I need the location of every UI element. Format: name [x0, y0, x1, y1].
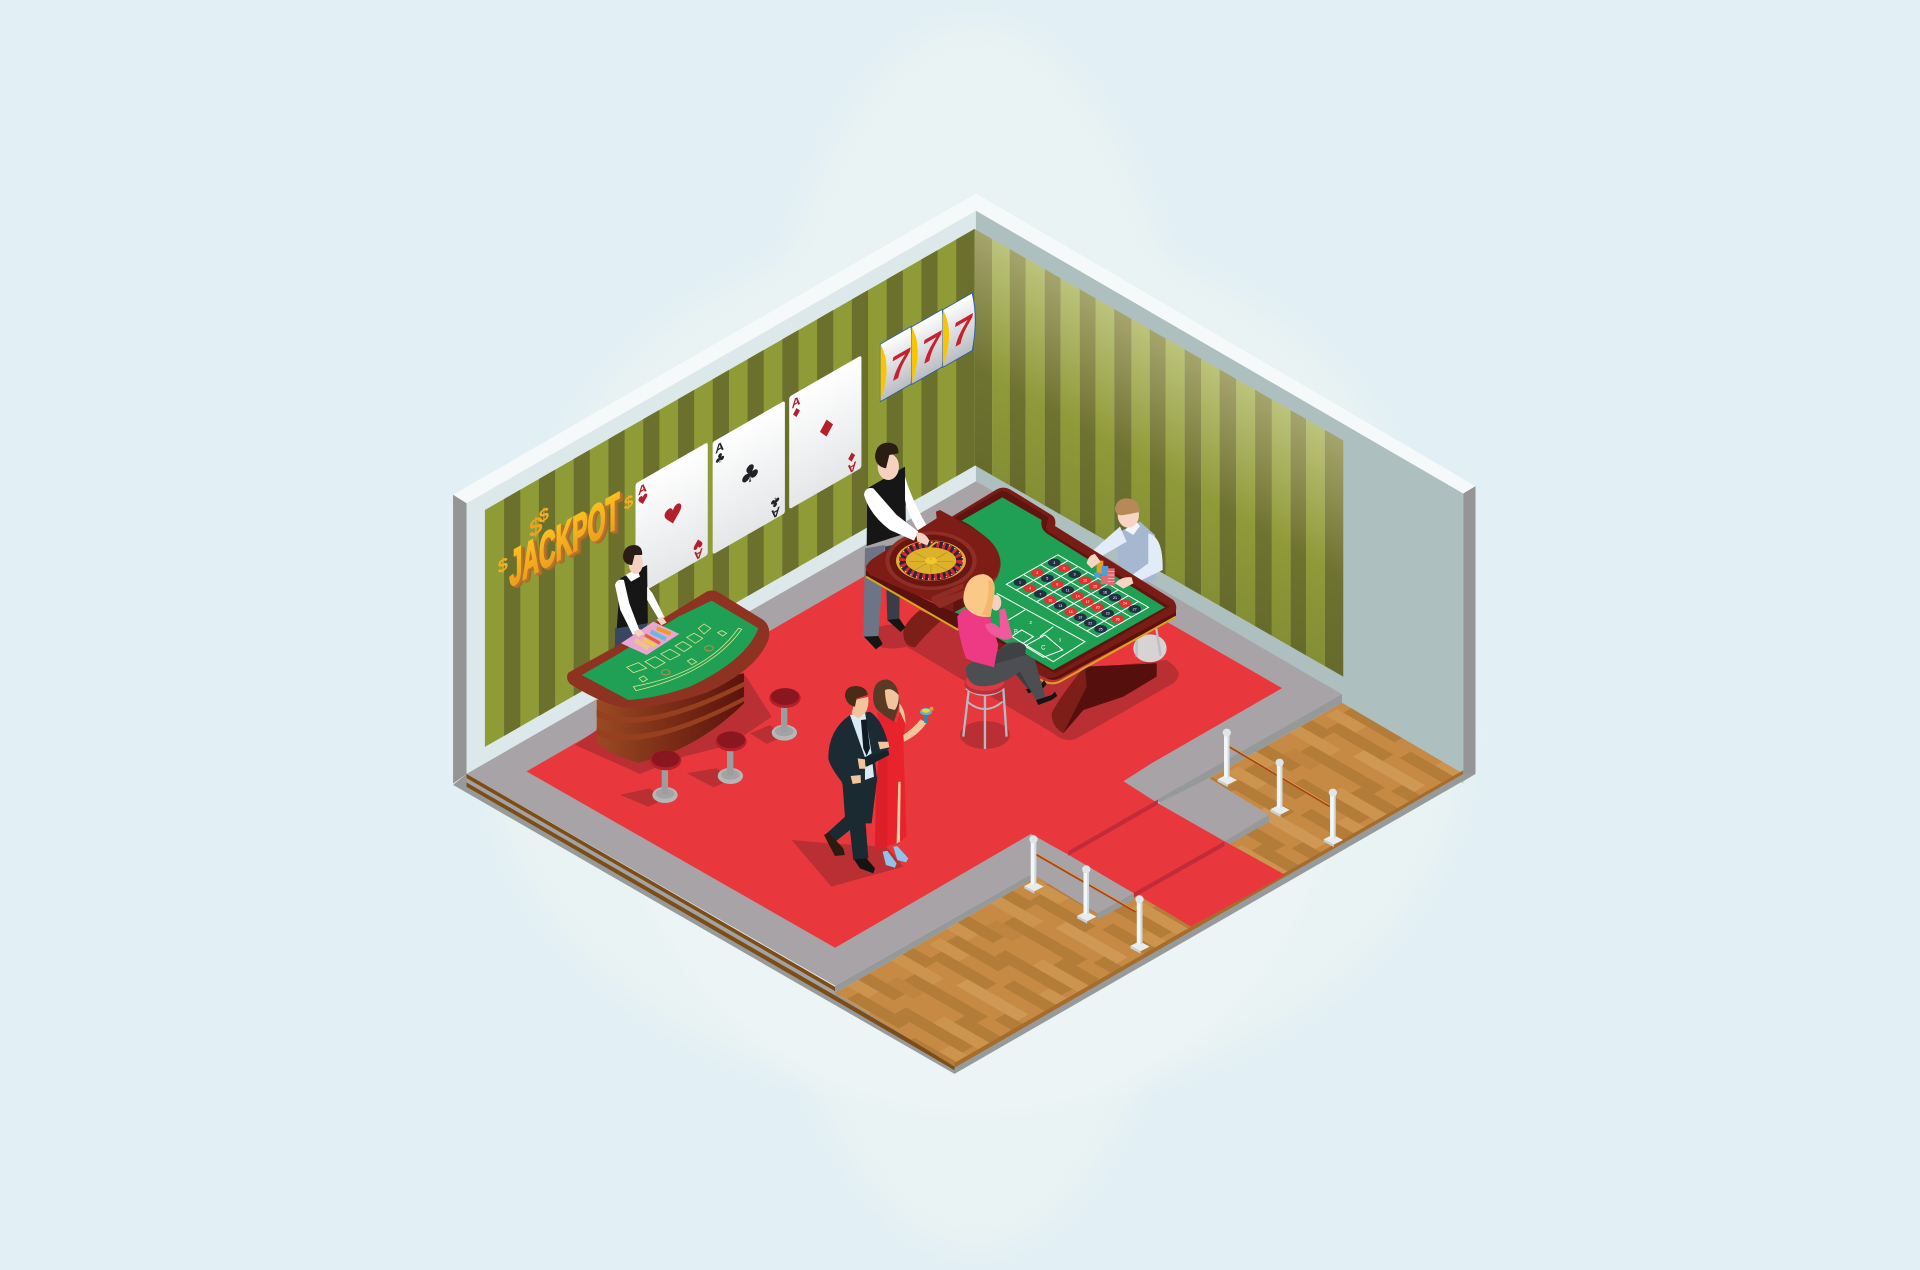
card: ace of diamonds — [789, 355, 861, 511]
card: ace of diamonds: A — [792, 392, 801, 412]
shoes — [824, 832, 845, 856]
jackpot wall sign: $ — [498, 553, 508, 579]
shirt — [850, 712, 872, 757]
felt markings — [627, 624, 742, 691]
red dress — [875, 712, 907, 850]
chip stacks — [1094, 561, 1115, 586]
couple shadow — [792, 840, 903, 887]
number chips: 12 — [1083, 579, 1087, 583]
card: ace of clubs: ♣ — [740, 454, 760, 493]
slot machine 777 reels — [880, 291, 975, 402]
red carpet steps — [1068, 803, 1224, 893]
number chips: 11 — [1066, 588, 1070, 592]
arm — [903, 719, 927, 742]
under-floor fill — [835, 703, 1463, 1067]
cocktail — [920, 707, 934, 723]
number chips: 27 — [1133, 607, 1137, 611]
pink sleeve — [985, 608, 1013, 640]
number chips: 4 — [1029, 587, 1031, 591]
trousers — [966, 642, 1045, 700]
number chips: 19 — [1078, 616, 1082, 620]
bare shoulder — [899, 703, 905, 725]
number chips: 1 — [1019, 581, 1021, 585]
blonde hair — [963, 574, 995, 617]
reel 1: 7 — [890, 339, 912, 390]
blackjack area — [567, 545, 801, 807]
room walls — [453, 193, 1476, 784]
left rope and posts — [1024, 835, 1150, 954]
hands — [851, 742, 889, 784]
number chips: 2 — [1036, 571, 1038, 575]
stool 2 — [715, 731, 747, 784]
table rim — [567, 590, 769, 707]
woman on stool — [957, 574, 1057, 749]
wood floor — [835, 703, 1463, 1067]
number chips: 14 — [1076, 594, 1080, 598]
card: ace of hearts: ♥ — [637, 491, 648, 511]
long hair — [873, 679, 899, 722]
number chips: 23 — [1106, 612, 1110, 616]
card: ace of clubs: ♣ — [770, 491, 781, 511]
rim — [940, 488, 1176, 678]
outside bets box: B — [1014, 629, 1018, 635]
outside bets box: 2 — [1029, 620, 1032, 625]
right wall inner face — [976, 211, 1463, 784]
green felt — [953, 497, 1165, 670]
number chips: 3 — [1053, 561, 1055, 565]
blackjack dealer — [615, 545, 667, 653]
reel 2: 7 — [921, 322, 943, 373]
seated-side player — [1092, 498, 1163, 584]
card: ace of diamonds: ♦ — [791, 404, 802, 424]
number chips: 15 — [1093, 584, 1097, 588]
entry steps grey — [1031, 834, 1134, 913]
couple — [792, 679, 934, 887]
dealer hands — [633, 617, 667, 637]
left wall end — [453, 495, 467, 784]
blackjack table — [567, 590, 801, 807]
stool shadows — [620, 725, 783, 807]
number chips: 8 — [1056, 583, 1058, 587]
card: ace of hearts: ♥ — [662, 496, 683, 535]
number chips: 24 — [1123, 602, 1127, 606]
number chips — [1014, 559, 1141, 633]
number chips: 6 — [1063, 567, 1065, 571]
card: ace of diamonds: ♦ — [846, 446, 857, 466]
jackpot wall sign: $ — [624, 490, 633, 514]
left striped wallpaper — [485, 229, 975, 747]
number chips: 21 — [1113, 596, 1117, 600]
table drum base — [597, 673, 744, 763]
card: ace of hearts — [636, 442, 708, 598]
right wall end — [1463, 486, 1476, 781]
card: ace of hearts: ♥ — [692, 533, 703, 553]
croupier arm — [864, 488, 929, 545]
pink top — [957, 608, 998, 667]
outside bets box: 3 — [1059, 637, 1062, 642]
card: ace of hearts: A — [638, 479, 647, 499]
number chips: 10 — [1048, 598, 1052, 602]
table legs — [903, 610, 1157, 733]
stool shadow — [960, 721, 1010, 749]
stool 1 — [769, 688, 801, 741]
jacket — [828, 712, 889, 787]
card: ace of clubs: A — [715, 438, 724, 457]
shoes — [1026, 680, 1057, 705]
back stool behind table — [1133, 627, 1167, 662]
woman in red dress — [873, 679, 934, 868]
number chips: 20 — [1096, 606, 1100, 610]
red carpet — [527, 512, 1282, 948]
jackpot wall sign: $ — [529, 509, 543, 544]
yellow trim — [1040, 617, 1176, 683]
jackpot wall sign — [498, 482, 633, 600]
right rope and posts — [1218, 729, 1343, 847]
card: ace of clubs: A — [771, 503, 780, 523]
roulette wheel console — [866, 510, 1001, 630]
bar stool — [963, 672, 1007, 749]
number chips: 9 — [1074, 573, 1076, 577]
left wall inner face — [467, 211, 976, 774]
number chips: 22 — [1088, 621, 1092, 625]
number chips: 5 — [1046, 577, 1048, 581]
roulette wheel — [885, 531, 977, 590]
raised hand — [991, 595, 1001, 611]
tie — [861, 719, 870, 756]
reel 3: 7 — [953, 304, 974, 356]
card: ace of hearts: A — [694, 545, 703, 564]
number grid lines — [1006, 555, 1149, 637]
stool 3 — [650, 750, 681, 803]
jackpot wall sign: JACKPOT — [509, 482, 620, 598]
roulette table top — [940, 488, 1176, 683]
chip tray — [621, 622, 679, 655]
number chips: 25 — [1099, 627, 1103, 631]
number chips: 7 — [1039, 592, 1041, 596]
jackpot wall sign: JACKPOT — [511, 483, 621, 600]
card: ace of diamonds: ♦ — [816, 409, 837, 448]
face — [852, 697, 868, 718]
outside bets box: C — [1041, 645, 1046, 651]
green felt — [582, 601, 758, 700]
hair — [845, 686, 868, 707]
rope stanchions — [1024, 729, 1343, 954]
floor — [453, 481, 1476, 1074]
back leg — [1015, 665, 1034, 689]
number chips: 13 — [1058, 604, 1062, 608]
grey floor — [467, 481, 1342, 986]
card: ace of clubs: ♣ — [714, 449, 725, 469]
croupier at wheel — [863, 443, 928, 649]
trousers — [825, 777, 877, 860]
card: ace of diamonds: A — [847, 458, 857, 477]
table shadow on carpet — [863, 610, 1179, 740]
player hands — [1087, 554, 1133, 589]
card: ace of clubs — [713, 400, 785, 556]
number chips: 16 — [1069, 610, 1073, 614]
man in black suit — [824, 686, 889, 873]
number chips: 17 — [1086, 600, 1090, 604]
number chips: 26 — [1116, 617, 1120, 621]
platform side layers — [453, 774, 1476, 1074]
sleeve — [860, 750, 889, 767]
table shadow — [575, 675, 772, 774]
leg slit — [897, 782, 901, 843]
heels — [883, 846, 908, 868]
outside bets box — [997, 593, 1085, 662]
jackpot wall sign: JACKPOT — [513, 484, 623, 600]
table underside — [953, 607, 1176, 680]
wall top cap — [453, 193, 1476, 503]
number chips: 18 — [1103, 590, 1107, 594]
roulette area — [863, 443, 1179, 740]
paper — [865, 764, 874, 780]
face — [885, 689, 899, 710]
jackpot wall sign: $ — [539, 503, 549, 529]
right striped wallpaper — [975, 229, 1343, 677]
